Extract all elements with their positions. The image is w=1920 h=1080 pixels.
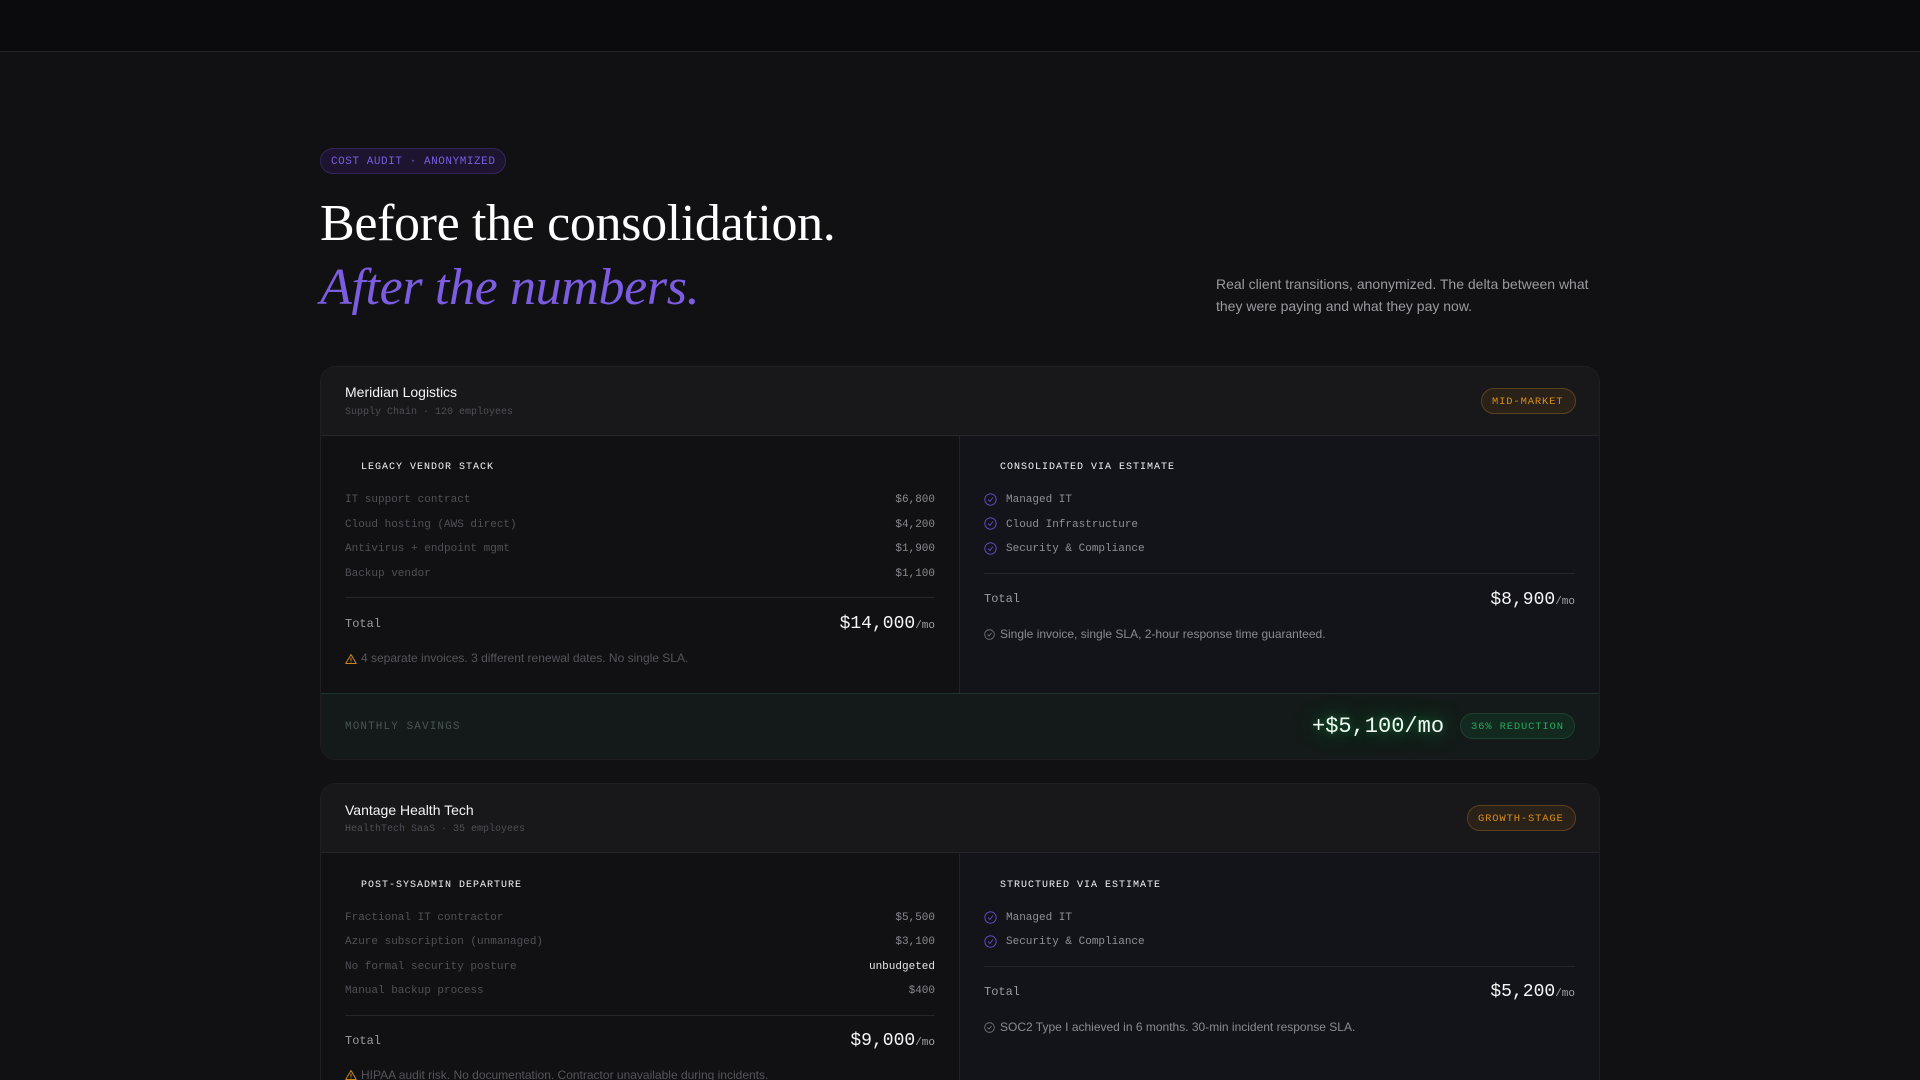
icon: check [984, 542, 997, 555]
top navigation bar [0, 0, 1920, 52]
legacy column: Cloud hosting (AWS direct) [345, 519, 517, 531]
column heading: CONSOLIDATED VIA ESTIMATE [1000, 462, 1175, 473]
savings amount: +$5,100/mo [1312, 714, 1444, 739]
legacy column: $4,200 [895, 519, 935, 531]
total amount: $8,900/mo [1490, 590, 1575, 610]
legacy column: Antivirus + endpoint mgmt [345, 543, 510, 555]
service: Managed IT [1006, 912, 1072, 924]
legacy column [321, 436, 960, 693]
eyebrow pill: COST AUDIT · ANONYMIZED [331, 156, 495, 168]
legacy column: No formal security posture [345, 961, 517, 973]
reduction badge: 36% REDUCTION [1471, 721, 1564, 733]
total label: Total [984, 592, 1020, 606]
intro text: Real client transitions, anonymized. The delta between what they were paying and what they pay now. [1216, 276, 1589, 314]
segment badge [1481, 388, 1576, 414]
total label: Total [345, 1034, 381, 1048]
eyebrow pill [320, 148, 506, 174]
legacy column: $1,100 [895, 568, 935, 580]
service: Cloud Infrastructure [1006, 519, 1138, 531]
title line one: Before the consolidation. [320, 195, 835, 252]
card header [321, 367, 1599, 436]
card header [321, 784, 1599, 853]
service: Security & Compliance [1006, 543, 1145, 555]
outcome note: SOC2 Type I achieved in 6 months. 30-min incident response SLA. [1000, 1020, 1355, 1034]
segment badge [1467, 805, 1576, 831]
icon: check [984, 493, 997, 506]
warning note: 4 separate invoices. 3 different renewal dates. No single SLA. [361, 651, 688, 665]
icon: check [984, 517, 997, 530]
structured column [960, 853, 1599, 1080]
panel: Meridian Logistics [320, 366, 1600, 760]
consolidated column [960, 436, 1599, 693]
total amount: $5,200/mo [1490, 982, 1575, 1002]
legacy column: $400 [909, 985, 935, 997]
legacy column: Backup vendor [345, 568, 431, 580]
company name: Meridian Logistics [345, 384, 457, 400]
line items: Fractional IT contractor [345, 912, 503, 924]
total amount: $9,000/mo [850, 1031, 935, 1051]
legacy column: Azure subscription (unmanaged) [345, 936, 543, 948]
icon: check [984, 629, 995, 640]
legacy column: unbudgeted [869, 961, 935, 973]
panel: Vantage Health Tech [320, 783, 1600, 1080]
segment badge: GROWTH-STAGE [1478, 813, 1564, 825]
legacy column: Manual backup process [345, 985, 484, 997]
total label: Total [345, 617, 381, 631]
column heading: LEGACY VENDOR STACK [361, 462, 494, 473]
company descriptor: Supply Chain · 120 employees [345, 407, 513, 418]
service: Security & Compliance [1006, 936, 1145, 948]
icon: check [984, 935, 997, 948]
legacy column: $3,100 [895, 936, 935, 948]
total amount: $14,000/mo [840, 614, 935, 634]
total label: Total [984, 985, 1020, 999]
company descriptor: HealthTech SaaS · 35 employees [345, 824, 525, 835]
column heading: POST-SYSADMIN DEPARTURE [361, 880, 522, 891]
company name: Vantage Health Tech [345, 802, 474, 818]
savings label: MONTHLY SAVINGS [345, 721, 461, 733]
icon: check [984, 1022, 995, 1033]
legacy column [321, 853, 960, 1080]
legacy column: $5,500 [895, 912, 935, 924]
icon: warning [345, 654, 357, 664]
legacy column: $1,900 [895, 543, 935, 555]
icon: check [984, 911, 997, 924]
outcome note: Single invoice, single SLA, 2-hour response time guaranteed. [1000, 627, 1326, 641]
service: Managed IT [1006, 494, 1072, 506]
savings strip [321, 693, 1599, 759]
reduction badge [1460, 713, 1575, 739]
icon: warning [345, 1070, 357, 1080]
title line two: After the numbers. [320, 259, 699, 316]
line items: IT support contract [345, 494, 470, 506]
legacy column: $6,800 [895, 494, 935, 506]
column heading: STRUCTURED VIA ESTIMATE [1000, 880, 1161, 891]
segment badge: MID-MARKET [1492, 396, 1563, 408]
